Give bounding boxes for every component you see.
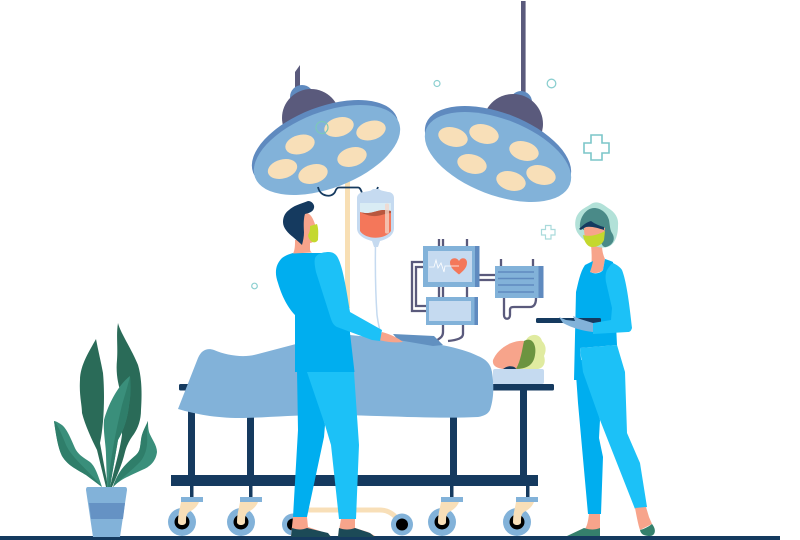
monitor: lower screen <box>426 297 478 325</box>
iv pole <box>344 176 350 308</box>
wheel 1 <box>168 497 203 536</box>
doctor shoes <box>291 517 375 537</box>
right surgical lamp <box>412 1 584 220</box>
bed frame <box>171 384 554 498</box>
doctor hand <box>379 332 403 342</box>
plant <box>54 323 157 537</box>
left surgical lamp <box>239 65 413 213</box>
plant left leaf <box>54 421 102 487</box>
iv hook <box>318 187 378 196</box>
patient sheet <box>178 334 493 418</box>
nurse legs <box>575 345 647 514</box>
nurse glove <box>559 316 593 332</box>
patient head <box>493 335 546 384</box>
nurse shoes <box>567 507 655 536</box>
nurse head with cap and mask <box>575 202 618 248</box>
plant right leaf <box>113 421 157 487</box>
nurse scrub top <box>574 259 617 380</box>
plant pot <box>86 487 127 537</box>
wheel 3 <box>428 497 463 536</box>
plant back leaf left <box>80 339 108 487</box>
nurse sleeve <box>593 263 632 334</box>
doctor sleeve <box>315 252 382 341</box>
nurse tray <box>536 318 601 323</box>
small wheel left <box>282 514 304 536</box>
doctor scrub top <box>276 253 354 372</box>
plant back leaf right <box>110 323 142 487</box>
nurse <box>536 202 655 536</box>
iv blood bag <box>357 189 394 334</box>
small wheel right <box>391 514 413 536</box>
doctor <box>276 201 403 537</box>
nurse neck <box>590 245 605 273</box>
connecting bar between small wheels <box>300 510 399 521</box>
doctor legs <box>293 370 359 519</box>
wheel 2 <box>227 497 262 536</box>
monitor: vent panel <box>495 266 544 298</box>
wheels <box>168 497 538 536</box>
wheel 4 <box>503 497 538 536</box>
monitor: heart rate <box>423 246 480 287</box>
ground line <box>0 536 780 540</box>
monitor cables <box>412 239 536 341</box>
icon: decorative circles and crosses <box>252 79 609 289</box>
doctor head and neck <box>283 201 318 254</box>
plant middle leaf <box>104 376 131 487</box>
